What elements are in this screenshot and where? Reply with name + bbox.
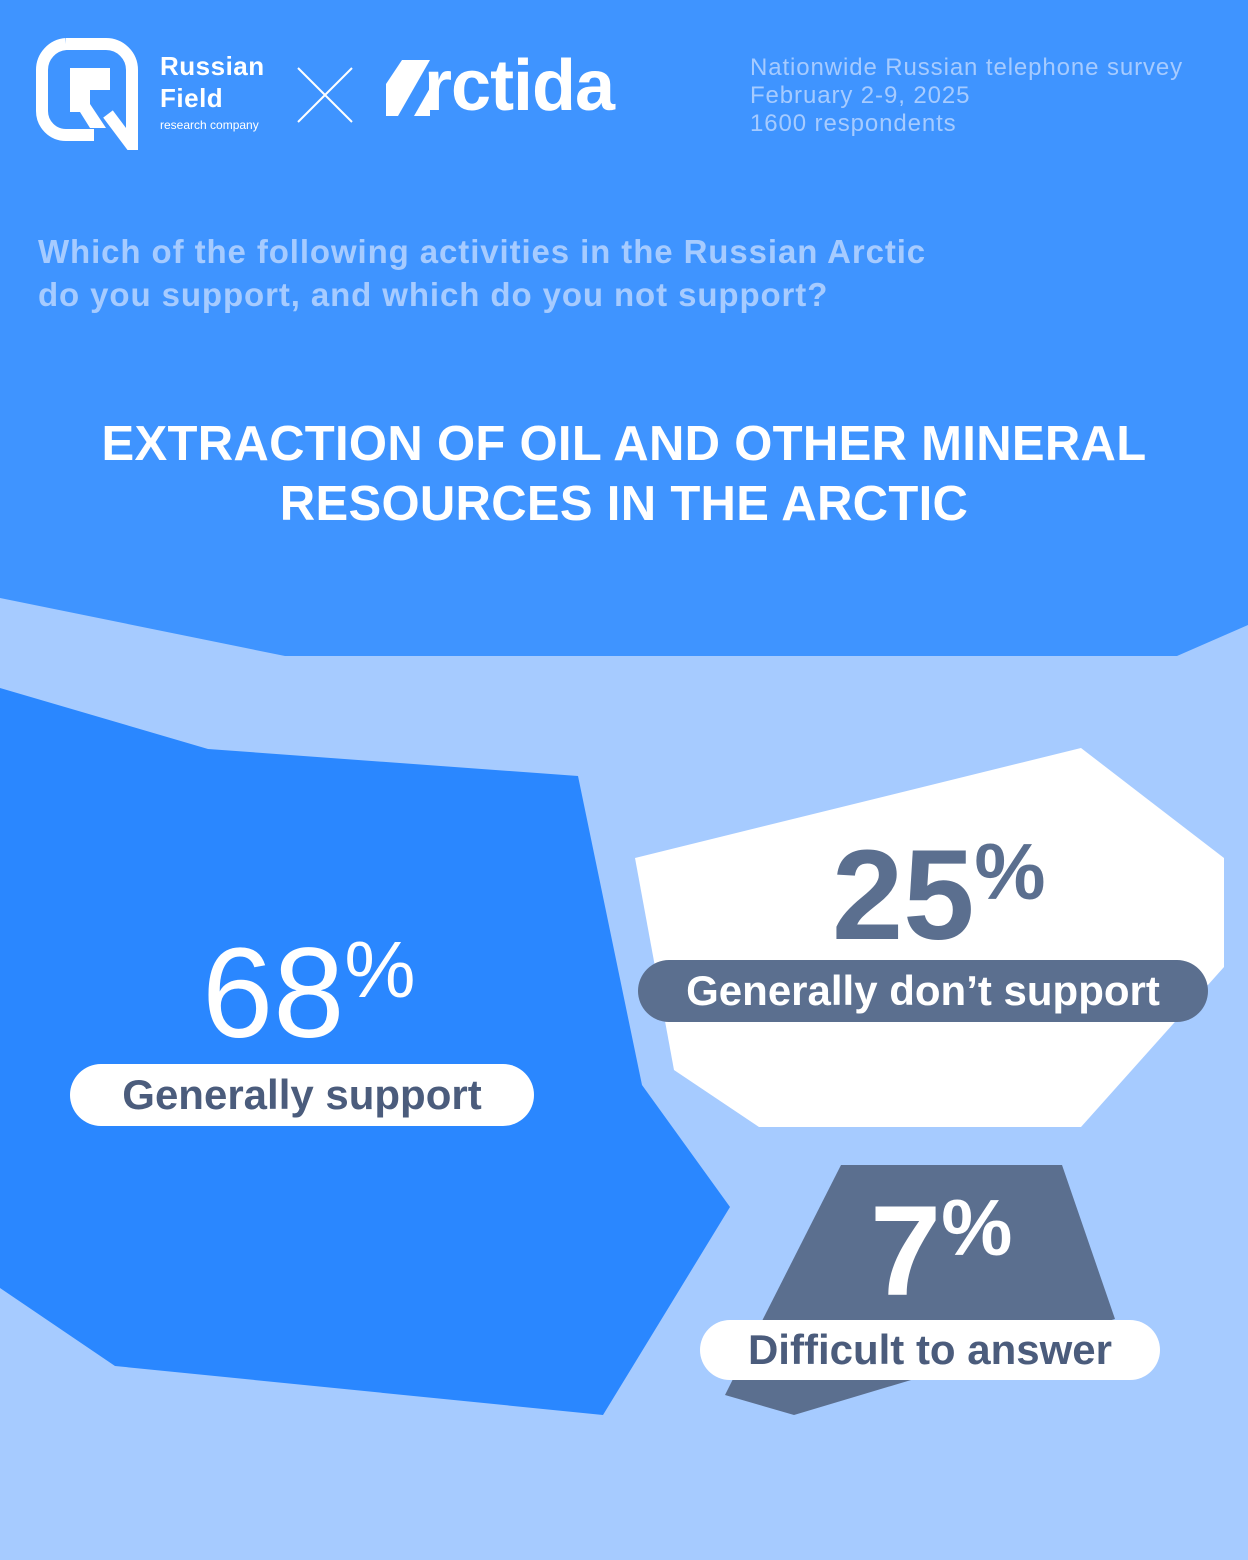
label: don't support bbox=[638, 960, 1208, 1022]
label: generally support bbox=[70, 1064, 534, 1126]
label: difficult to answer bbox=[700, 1320, 1160, 1380]
title: EXTRACTION OF OIL AND OTHER MINERAL bbox=[102, 417, 1146, 471]
survey info: Nationwide Russian telephone survey bbox=[750, 54, 1183, 81]
stat: 7% bbox=[700, 1180, 1160, 1380]
title bbox=[102, 417, 1146, 531]
label: generally support: Generally support bbox=[122, 1071, 482, 1118]
logo: Russian Field: Field bbox=[160, 83, 223, 113]
stat: 68% bbox=[70, 922, 534, 1126]
stat: 68%: 68% bbox=[202, 922, 416, 1065]
question: Which of the following activities in the Russian Arctic bbox=[38, 233, 926, 270]
shape: don't support bbox=[635, 748, 1224, 1127]
logo: Russian Field bbox=[36, 38, 265, 150]
title: RESOURCES IN THE ARCTIC bbox=[280, 477, 968, 531]
question bbox=[38, 233, 926, 313]
shape: difficult bbox=[725, 1165, 1115, 1415]
logo: Arctida: rctida bbox=[424, 46, 614, 126]
survey info: February 2-9, 2025 bbox=[750, 82, 970, 109]
survey info: 1600 respondents bbox=[750, 110, 957, 137]
question: do you support, and which do you not support? bbox=[38, 276, 828, 313]
icon: cross bbox=[297, 67, 353, 123]
label: difficult to answer: Difficult to answer bbox=[748, 1326, 1112, 1373]
logo: Russian Field: Russian bbox=[160, 51, 265, 81]
stat: 25%: 25% bbox=[832, 824, 1046, 967]
shape: support bbox=[0, 688, 730, 1415]
logo: Russian Field: research company bbox=[160, 118, 259, 132]
label: don't support: Generally don’t support bbox=[686, 967, 1160, 1014]
stat: 25% bbox=[638, 824, 1208, 1022]
stat: 7%: 7% bbox=[870, 1180, 1012, 1323]
survey info bbox=[750, 54, 1183, 137]
